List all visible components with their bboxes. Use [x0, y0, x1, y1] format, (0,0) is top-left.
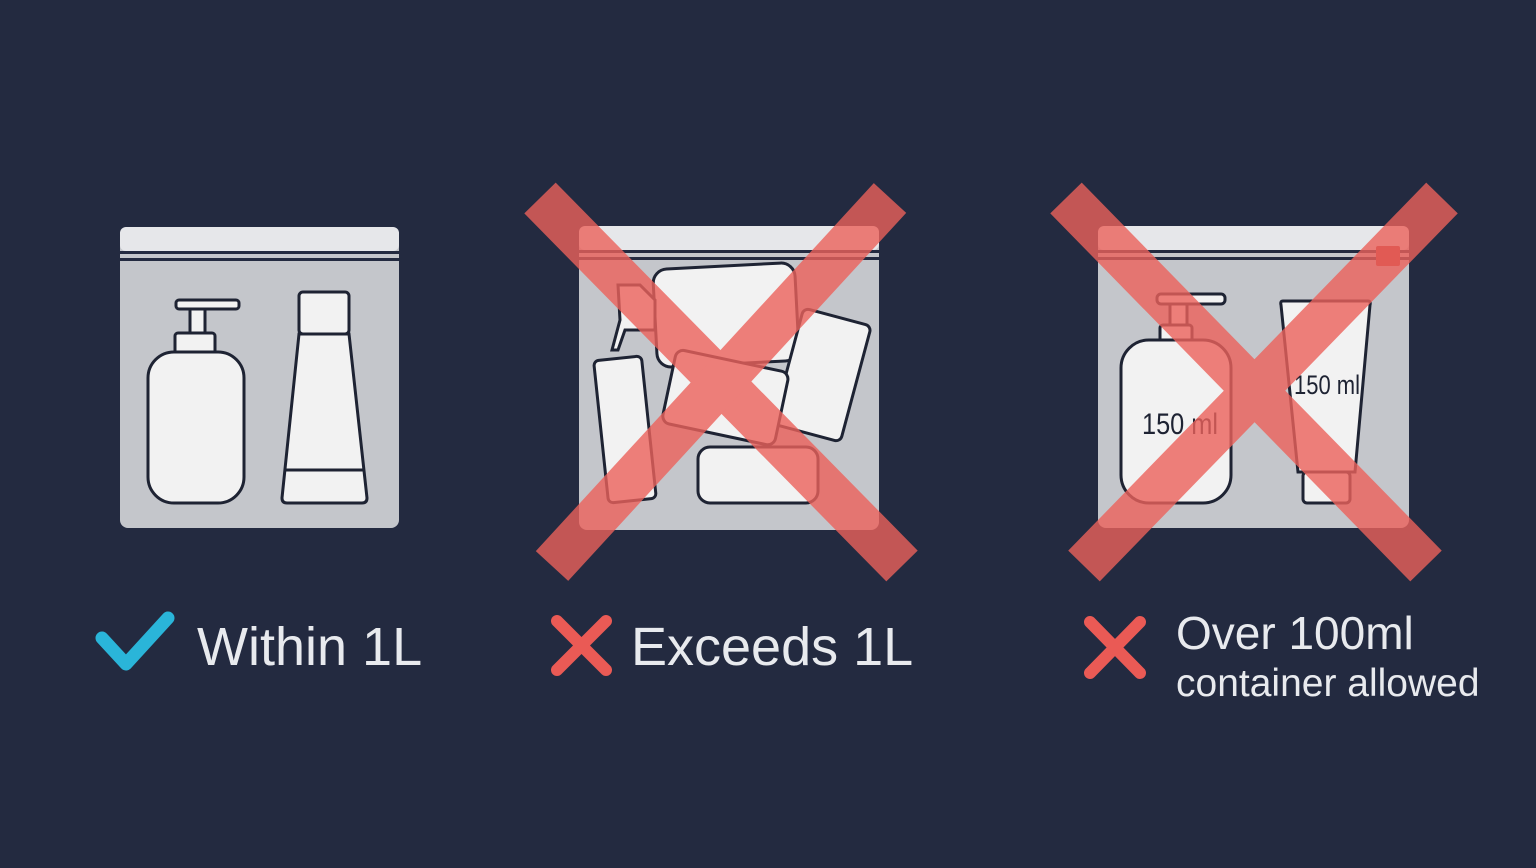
icon: 150ml tube [1281, 301, 1370, 503]
icon: red x [557, 621, 606, 670]
panel: over 100ml bag: 150 ml [1294, 370, 1360, 400]
icon: check [102, 618, 168, 664]
icon: pump bottle [148, 300, 244, 503]
panel: over 100ml bag [1066, 198, 1442, 566]
label: exceeds 1L: Exceeds 1L [631, 617, 913, 677]
icon: 150ml bottle [1121, 294, 1231, 503]
label: within 1L: Within 1L [197, 617, 422, 677]
icon: big red cross [1066, 198, 1442, 566]
panel: exceeds 1L bag [540, 198, 902, 566]
panel: over 100ml bag: 150 ml [1142, 408, 1218, 441]
icon: big red cross [540, 198, 902, 566]
label: over 100ml [1090, 607, 1480, 705]
icon: tube [282, 292, 367, 503]
icon: red x [1090, 622, 1140, 673]
icon: crowded items [594, 262, 871, 503]
label: over 100ml: container allowed [1176, 662, 1480, 705]
panel: within 1L bag [120, 227, 399, 528]
label: over 100ml: Over 100ml [1176, 607, 1414, 659]
